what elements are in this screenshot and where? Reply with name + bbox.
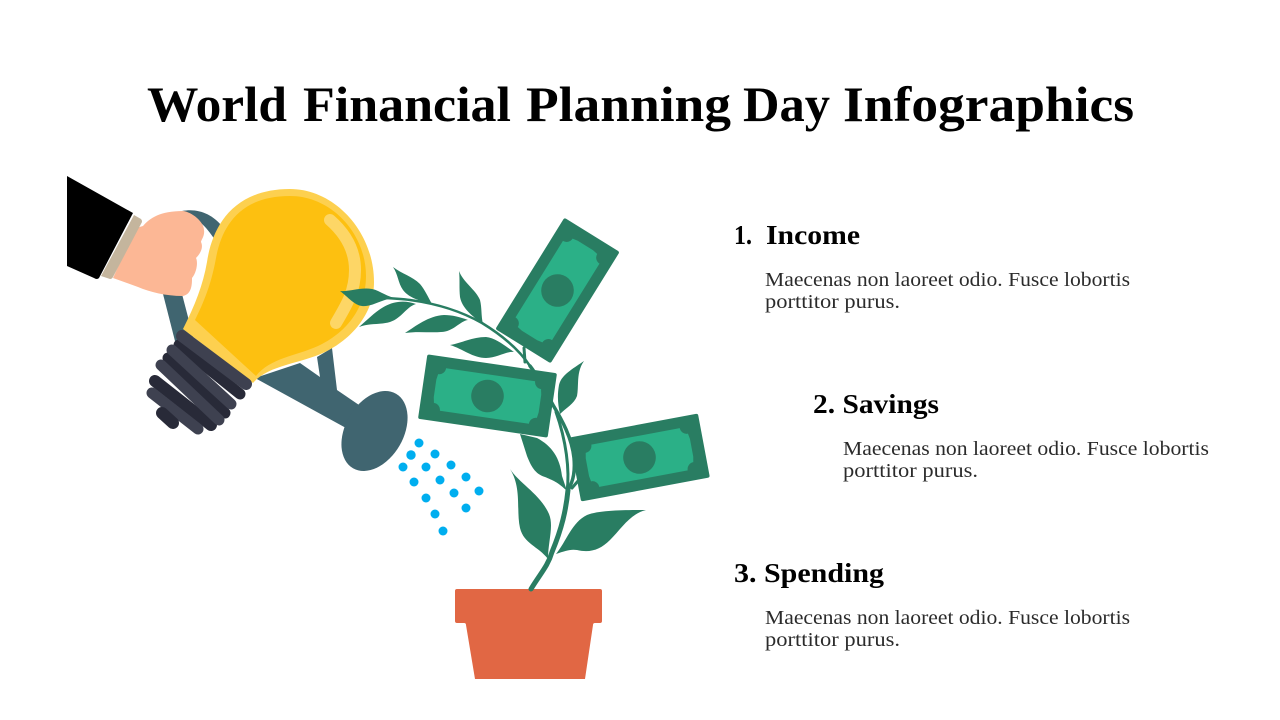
icon: plant pot	[455, 589, 602, 679]
heading: income	[734, 220, 860, 250]
text block: spending: porttitor purus.	[765, 629, 900, 651]
heading: savings: 2. Savings	[813, 389, 939, 419]
heading: spending: 3. Spending	[734, 558, 885, 588]
icon: dollar bill middle	[418, 354, 557, 438]
text block: savings	[843, 438, 1209, 482]
plant leaves	[340, 267, 646, 559]
text block: income: porttitor purus.	[765, 291, 900, 313]
text block: income: Maecenas non laoreet odio. Fusce lobortis	[765, 269, 1130, 291]
icon: dollar bill right	[569, 414, 710, 501]
sleeve	[67, 176, 133, 279]
title: Planning	[526, 76, 731, 132]
text block: savings: Maecenas non laoreet odio. Fusce lobortis	[843, 438, 1209, 460]
section: savings	[813, 389, 1209, 482]
title: Financial	[303, 76, 511, 132]
heading: income: Income	[766, 220, 860, 250]
section: income	[734, 220, 1130, 313]
title: Day	[743, 76, 830, 132]
illustration: watering can bulb and money plant	[67, 176, 710, 679]
text block: spending: Maecenas non laoreet odio. Fusce lobortis	[765, 607, 1130, 629]
title: Infographics	[843, 76, 1134, 132]
icon: hand holding the bulb	[67, 176, 204, 296]
heading: income: 1.	[734, 220, 752, 250]
icon: bulb screw base	[152, 336, 246, 429]
icon: watering can handle and spout	[163, 210, 421, 483]
fist	[113, 211, 204, 296]
text block: savings: porttitor purus.	[843, 460, 978, 482]
title: World	[147, 76, 287, 132]
text block: income	[765, 269, 1130, 313]
section: spending	[734, 558, 1130, 651]
icon: light bulb	[183, 189, 374, 383]
shirt cuff	[101, 215, 142, 279]
text block: spending	[765, 607, 1130, 651]
title	[147, 76, 1134, 132]
plant stems	[370, 297, 578, 589]
icon: dollar bill top	[495, 218, 620, 363]
icon: water drops	[398, 438, 484, 536]
